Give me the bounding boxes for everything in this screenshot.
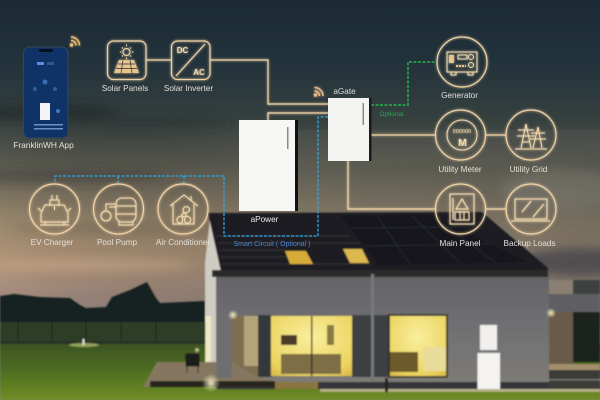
installed aPower on wall	[478, 353, 500, 389]
icon box: solar panels	[108, 41, 146, 80]
installed aGate on wall	[480, 325, 497, 350]
front wall	[216, 274, 549, 382]
icon: utility grid	[506, 110, 556, 160]
label: FranklinWH App: FranklinWH App	[13, 140, 74, 150]
landscape: treeline, field and lawn	[0, 282, 600, 400]
label: Optional: Optional	[379, 111, 404, 118]
right extension	[548, 280, 600, 391]
icon: EV charger	[30, 184, 80, 234]
label: Main Panel: Main Panel	[440, 239, 481, 248]
icon: pool pump	[94, 184, 144, 234]
label: aPower: aPower	[251, 215, 279, 224]
roof solar array	[341, 215, 527, 265]
label: Utility Grid: Utility Grid	[510, 165, 548, 174]
icon box: solar inverter	[172, 41, 210, 80]
label: Pool Pump: Pool Pump	[97, 238, 137, 247]
icon: air conditioner	[158, 184, 208, 234]
label: Smart Circuit: Smart Circuit ( Optional )	[233, 241, 311, 248]
device: aGate	[328, 98, 372, 161]
garden lights	[194, 308, 556, 392]
left window	[271, 316, 352, 376]
icon: utility meter	[436, 110, 486, 160]
label: Solar Inverter: Solar Inverter	[164, 84, 213, 93]
roof	[208, 212, 548, 276]
recessed entry	[232, 316, 258, 377]
skylights	[285, 251, 313, 264]
optional generator line	[371, 62, 436, 105]
label: Backup Loads: Backup Loads	[504, 239, 555, 248]
icon box: solar inverter: AC	[193, 68, 205, 77]
patio chair	[186, 354, 199, 373]
label: Generator: Generator	[441, 91, 478, 100]
icon: utility meter: 000000	[453, 129, 471, 135]
icon: utility meter: M	[458, 137, 467, 149]
foundation and steps	[216, 382, 549, 389]
icon: main panel	[436, 184, 486, 234]
label: EV Charger: EV Charger	[31, 238, 74, 247]
label: Solar Panels: Solar Panels	[102, 84, 148, 93]
right window	[389, 315, 447, 377]
connection lines	[146, 60, 506, 209]
icon: aGate wifi	[314, 88, 323, 96]
icon: generator	[437, 37, 487, 87]
smart circuit line	[55, 117, 328, 236]
app: FranklinWH phone	[24, 47, 68, 138]
device: aPower	[239, 120, 298, 211]
icon box: solar inverter: DC	[177, 46, 188, 55]
label: aGate: aGate	[333, 87, 356, 96]
house	[143, 212, 600, 392]
icon: backup loads	[506, 184, 556, 234]
label: Utility Meter: Utility Meter	[438, 165, 482, 174]
label: Air Conditioner: Air Conditioner	[156, 238, 210, 247]
icon: phone wifi	[70, 37, 80, 46]
fascia	[212, 270, 548, 277]
side gable wall	[205, 218, 222, 378]
